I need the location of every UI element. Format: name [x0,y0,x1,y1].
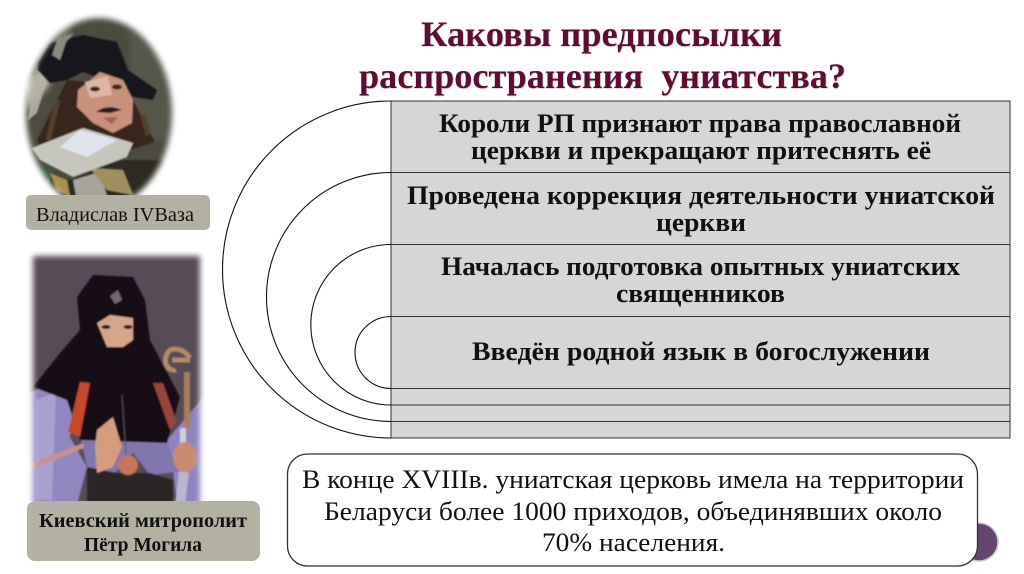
centre lavender [80,436,178,475]
callout: Беларуси более 1000 приходов, объединявших около [324,497,942,526]
caption: Киевский митрополит Пётр Могила: Пётр Могила [84,535,202,556]
nested arcs diagram [223,101,1010,438]
armour [50,160,164,195]
feather [28,86,45,120]
decorative page badge [960,523,998,561]
hat [38,35,157,100]
item 2 [407,181,995,237]
callout: 70% населения. [542,528,725,557]
caption: Владислав IV Ваза: Владислав IVВаза [36,204,194,226]
hair [37,80,155,150]
item 1: Короли РП признают права православной [439,109,961,138]
item 3: священников [616,279,785,308]
right mantle [167,395,205,505]
item 3: Началась подготовка опытных униатских [441,252,960,281]
dark lower robe [87,467,173,505]
callout [288,454,978,566]
item 3 [441,252,960,308]
item 2: Проведена коррекция деятельности униатской [407,181,995,210]
caption: Владислав IV Ваза [26,195,210,230]
title: распространения униатства? [359,56,846,96]
caption: Киевский митрополит Пётр Могила [27,501,260,561]
portrait: Владислав IV Ваза [22,14,176,195]
collar [32,128,133,177]
portrait: Пётр Могила [25,250,205,505]
arcs [223,101,391,438]
item 1 [439,109,961,165]
medallion [118,455,138,475]
hand [95,417,122,473]
staff [184,372,190,428]
face [77,72,133,133]
item 4: Введён родной язык в богослужении [472,337,930,366]
item 2: церкви [656,208,746,237]
panel: grey list background [391,101,1010,438]
title [359,14,846,96]
callout: В конце XVIIIв. униатская церковь имела на территории [302,465,964,494]
caption: Киевский митрополит Пётр Могила: Киевский митрополит [39,511,247,532]
left mantle [29,388,88,501]
item 1: церкви и прекращают притеснять её [471,136,931,165]
stripe [28,443,84,471]
veil [33,275,180,443]
face [97,315,133,347]
title: Каковы предпосылки [421,14,782,54]
red stoles [68,382,90,437]
